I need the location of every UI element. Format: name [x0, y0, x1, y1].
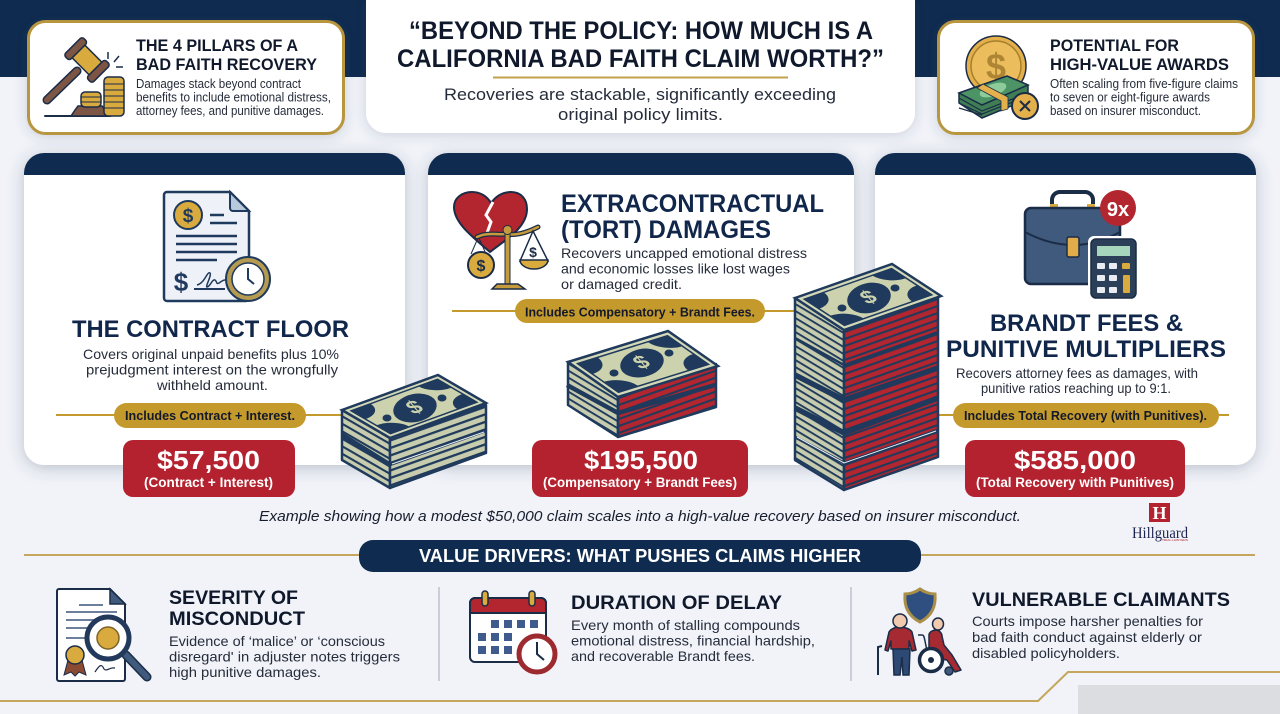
label pill: compensatory: Includes Compensatory + Brandt Fees.: [525, 304, 755, 320]
text: severity: Evidence of ‘malice’ or ‘conscious: [169, 633, 385, 649]
text: the 4 pillars: benefits to include emotional distress,: [136, 90, 331, 104]
heading: the 4 pillars: THE 4 PILLARS OF A: [136, 36, 298, 55]
text: the contract floor: withheld amount.: [156, 377, 268, 393]
text: the 4 pillars: attorney fees, and punitive damages.: [136, 104, 324, 118]
label pill: compensatory: [515, 299, 765, 323]
text: potential for high-value awards: [1050, 77, 1238, 118]
value driver: vulnerable claimants: [878, 589, 1230, 675]
label pill: contract: Includes Contract + Interest.: [125, 408, 295, 423]
panel: the contract floor: [24, 153, 405, 465]
logo: Hillguard: H: [1152, 503, 1167, 523]
text: severity: disregard' in adjuster notes triggers: [169, 648, 400, 664]
heading: extracontractual: EXTRACONTRACTUAL: [561, 190, 824, 218]
heading: the 4 pillars: BAD FAITH RECOVERY: [136, 55, 318, 74]
title: [397, 17, 884, 73]
value box: $57,500: $57,500: [157, 445, 260, 475]
value box: $585,000: (Total Recovery with Punitives): [976, 475, 1174, 490]
label pill: total recovery: [953, 403, 1219, 428]
text: vulnerable: bad faith conduct against elderly or: [972, 629, 1202, 645]
text: the 4 pillars: [136, 77, 331, 118]
subtitle: [444, 85, 836, 124]
text: the 4 pillars: Damages stack beyond contract: [136, 77, 301, 91]
value box: $57,500: (Contract + Interest): [144, 475, 273, 490]
text: the contract floor: Covers original unpaid benefits plus 10%: [83, 346, 339, 362]
money stack: medium: $: [627, 351, 655, 373]
text: extracontractual: and economic losses like lost wages: [561, 260, 790, 276]
money stack: small: [342, 375, 486, 488]
heading: vulnerable: VULNERABLE CLAIMANTS: [972, 590, 1230, 611]
value box: $195,500: $195,500: [584, 445, 698, 475]
text: duration: [571, 617, 815, 664]
value box: $57,500: [123, 440, 295, 497]
text: severity: high punitive damages.: [169, 664, 321, 680]
subtitle: Recoveries are stackable, significantly exceeding: [444, 85, 836, 104]
text: potential for high-value awards: Often scaling from five-figure claims: [1050, 77, 1238, 91]
heading: the contract floor: THE CONTRACT FLOOR: [72, 316, 349, 343]
icon: gavel and coins: [45, 37, 124, 116]
heading: the 4 pillars: [136, 36, 318, 74]
money stack: medium: [567, 331, 718, 437]
heading: severity: MISCONDUCT: [169, 609, 305, 630]
icon: broken heart and scales: $: [477, 258, 486, 275]
label pill: contract: [114, 403, 306, 428]
icon: coin and cash: $: [986, 46, 1006, 87]
logo: Hillguard: Hillguard: [1132, 525, 1188, 542]
text: extracontractual: [561, 245, 807, 292]
text: duration: Every month of stalling compounds: [571, 617, 800, 633]
caption: Example showing how a modest $50,000 claim scales into a high-value recovery based on insurer misconduct.: [259, 508, 1021, 525]
text: duration: and recoverable Brandt fees.: [571, 648, 755, 664]
value box: $585,000: $585,000: [1014, 445, 1136, 475]
heading: potential for high-value awards: [1050, 36, 1229, 74]
heading: potential for high-value awards: POTENTIAL FOR: [1050, 36, 1179, 55]
icon: shield and people: [878, 589, 961, 675]
subtitle: original policy limits.: [558, 105, 723, 124]
value box: $195,500: (Compensatory + Brandt Fees): [543, 475, 737, 490]
panel: the 4 pillars: [28, 22, 344, 134]
value driver: duration of delay: [470, 591, 815, 673]
text: the contract floor: [83, 346, 339, 393]
text: vulnerable: [972, 613, 1203, 661]
icon: briefcase, calculator and 9x badge: 9x: [1107, 199, 1129, 221]
text: brandt fees: [956, 365, 1198, 396]
heading: brandt fees: PUNITIVE MULTIPLIERS: [946, 336, 1226, 363]
icon: contract document and clock: [164, 192, 270, 301]
icon: broken heart and scales: [454, 192, 548, 289]
section header: value drivers: VALUE DRIVERS: WHAT PUSHES CLAIMS HIGHER: [419, 546, 861, 566]
logo: Hillguard: TRIAL LAWYERS: [1162, 539, 1188, 542]
panel: extracontractual damages: [428, 153, 854, 465]
icon: contract document and clock: $: [174, 267, 189, 297]
value box: $585,000: [965, 440, 1185, 497]
heading: severity: SEVERITY OF: [169, 588, 298, 609]
heading: severity: [169, 588, 305, 630]
text: severity: [169, 633, 400, 680]
heading: potential for high-value awards: HIGH-VALUE AWARDS: [1050, 55, 1229, 74]
text: brandt fees: punitive ratios reaching up to 9:1.: [981, 380, 1171, 396]
text: duration: emotional distress, financial hardship,: [571, 632, 815, 648]
heading: duration: DURATION OF DELAY: [571, 593, 782, 614]
value driver: severity of misconduct: [57, 588, 400, 681]
value box: $195,500: [532, 440, 748, 497]
text: potential for high-value awards: based on insurer misconduct.: [1050, 104, 1201, 118]
logo: Hillguard: [1132, 503, 1188, 542]
icon: briefcase, calculator and 9x badge: [1025, 190, 1139, 301]
panel: brandt fees and punitive multipliers: [875, 153, 1256, 465]
heading: brandt fees: [946, 310, 1226, 363]
heading: brandt fees: BRANDT FEES &: [990, 310, 1183, 337]
section header: value drivers: [359, 540, 921, 572]
title: CALIFORNIA BAD FAITH CLAIM WORTH?”: [397, 45, 884, 73]
icon: calendar and clock: [470, 591, 556, 673]
text: extracontractual: Recovers uncapped emotional distress: [561, 245, 807, 261]
label pill: total recovery: Includes Total Recovery (with Punitives).: [964, 408, 1207, 423]
money stack: small: $: [400, 396, 428, 418]
icon: broken heart and scales: $: [529, 244, 537, 260]
text: vulnerable: disabled policyholders.: [972, 645, 1120, 661]
icon: coin and cash: [959, 36, 1038, 119]
money stack: tall: [795, 264, 941, 490]
icon: contract document and clock: $: [183, 206, 194, 227]
text: extracontractual: or damaged credit.: [561, 276, 682, 292]
heading: extracontractual: [561, 190, 824, 244]
text: potential for high-value awards: to seven or eight-figure awards: [1050, 90, 1210, 104]
money stack: tall: $: [854, 286, 882, 308]
text: the contract floor: prejudgment interest on the wrongfully: [86, 362, 338, 378]
panel: potential for high-value awards: [938, 22, 1254, 134]
heading: extracontractual: (TORT) DAMAGES: [561, 216, 771, 244]
title: “BEYOND THE POLICY: HOW MUCH IS A: [409, 17, 873, 45]
text: vulnerable: Courts impose harsher penalties for: [972, 613, 1203, 629]
text: brandt fees: Recovers attorney fees as damages, with: [956, 365, 1198, 381]
icon: document and magnifier: [57, 589, 147, 681]
panel: title: [366, 0, 915, 133]
